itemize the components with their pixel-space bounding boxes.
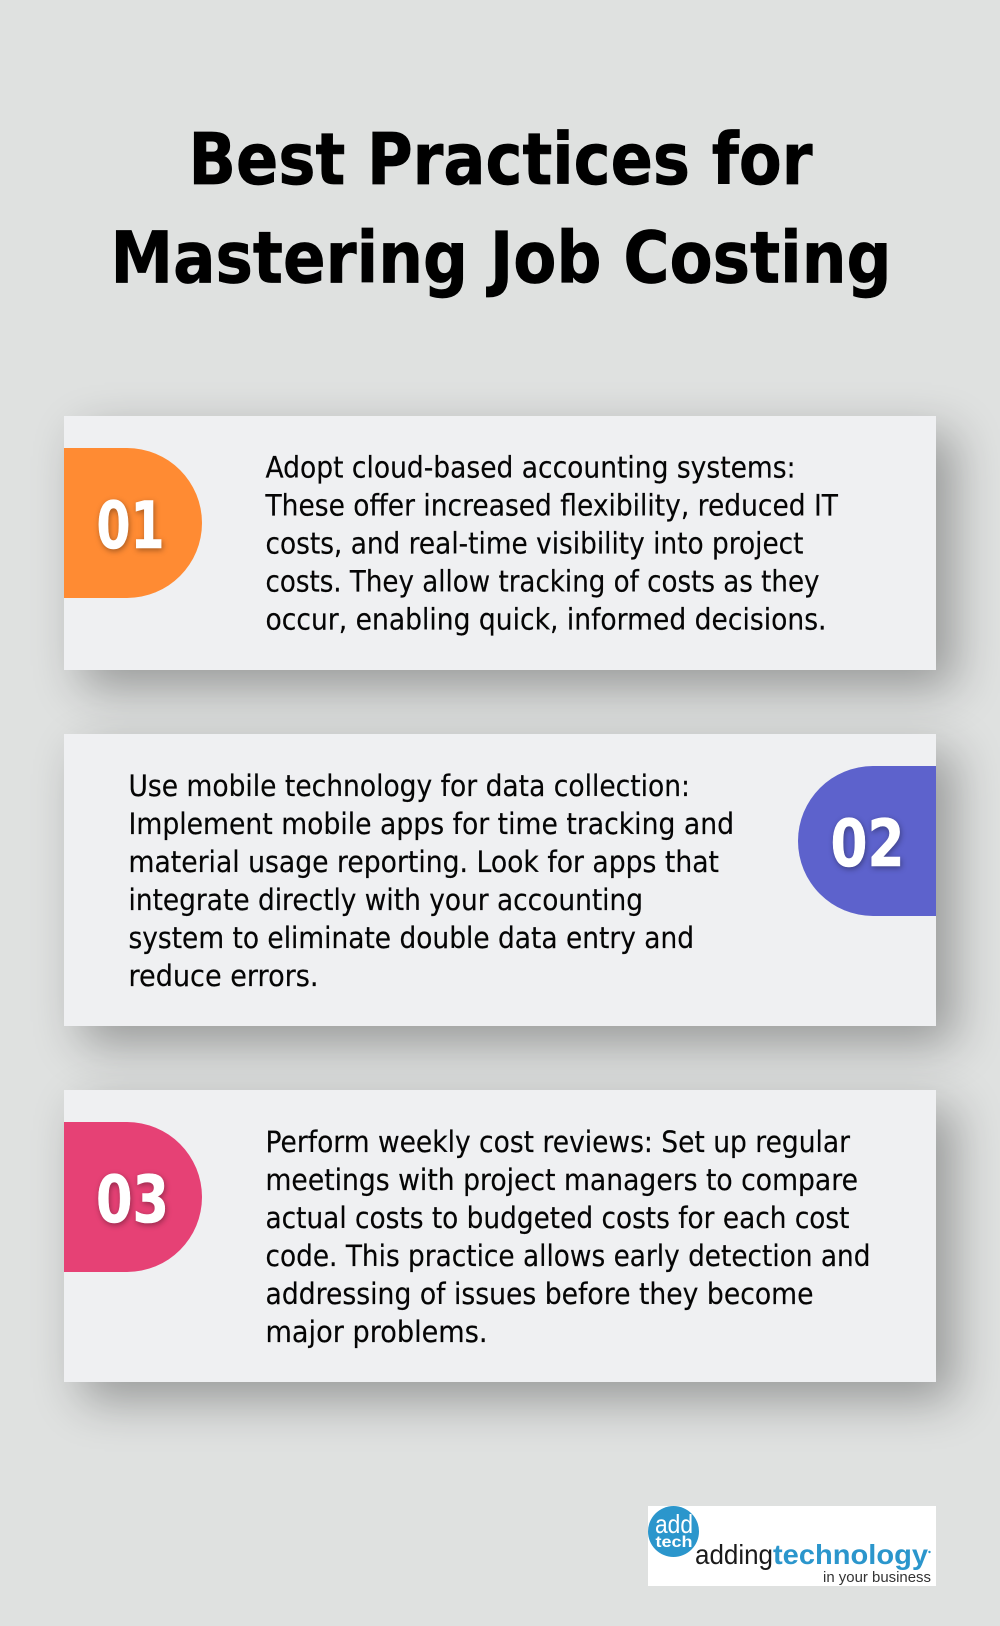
text: step 02 description: system to eliminate double data entry and — [128, 921, 694, 955]
logo: adding technology: technology — [773, 1539, 928, 1570]
text: step 02 description — [128, 769, 734, 993]
badge: 03 — [64, 1122, 202, 1272]
text: step 01 description: costs, and real-time visibility into project — [266, 527, 804, 561]
text: step 03 description — [266, 1125, 870, 1349]
text: step 02 description: reduce errors. — [128, 959, 318, 993]
text: step 01 description — [265, 451, 838, 637]
text: step 01 description: These offer increased flexibility, reduced IT — [265, 489, 838, 523]
text: step 03 description: meetings with project managers to compare — [266, 1163, 858, 1197]
panel: step 03 — [64, 1090, 936, 1382]
text: step 02 description: Use mobile technology for data collection: — [128, 769, 690, 803]
badge: 02 — [798, 766, 936, 916]
text: step 03 description: major problems. — [266, 1315, 488, 1349]
text: step 03 description: Perform weekly cost reviews: Set up regular — [266, 1125, 850, 1159]
badge: 03: 03 — [96, 1163, 169, 1238]
icon: add tech circle — [648, 1506, 699, 1557]
logo: adding technology: in your business — [823, 1570, 931, 1586]
logo: adding technology: adding — [695, 1539, 773, 1570]
text: step 03 description: code. This practice allows early detection and — [266, 1239, 870, 1273]
text: step 02 description: Implement mobile apps for time tracking and — [128, 807, 734, 841]
badge: 01: 01 — [96, 489, 164, 564]
text: step 01 description: Adopt cloud-based accounting systems: — [266, 451, 796, 485]
title: Mastering Job Costing — [110, 216, 892, 299]
title: Best Practices for — [188, 118, 812, 201]
text: step 02 description: material usage reporting. Look for apps that — [128, 845, 719, 879]
icon: add tech circle: add — [655, 1509, 693, 1539]
badge: 02: 02 — [830, 807, 904, 882]
icon: add tech circle: tech — [656, 1534, 692, 1551]
title — [110, 118, 892, 299]
logo: adding technology — [648, 1506, 936, 1586]
text: step 01 description: occur, enabling quick, informed decisions. — [266, 603, 826, 637]
text: step 03 description: actual costs to budgeted costs for each cost — [266, 1201, 850, 1235]
badge: 01 — [64, 448, 202, 598]
text: step 03 description: addressing of issues before they become — [266, 1277, 814, 1311]
panel: step 01 — [64, 416, 936, 670]
text: step 02 description: integrate directly with your accounting — [128, 883, 643, 917]
text: step 01 description: costs. They allow tracking of costs as they — [266, 565, 820, 599]
panel: step 02 — [64, 734, 936, 1026]
